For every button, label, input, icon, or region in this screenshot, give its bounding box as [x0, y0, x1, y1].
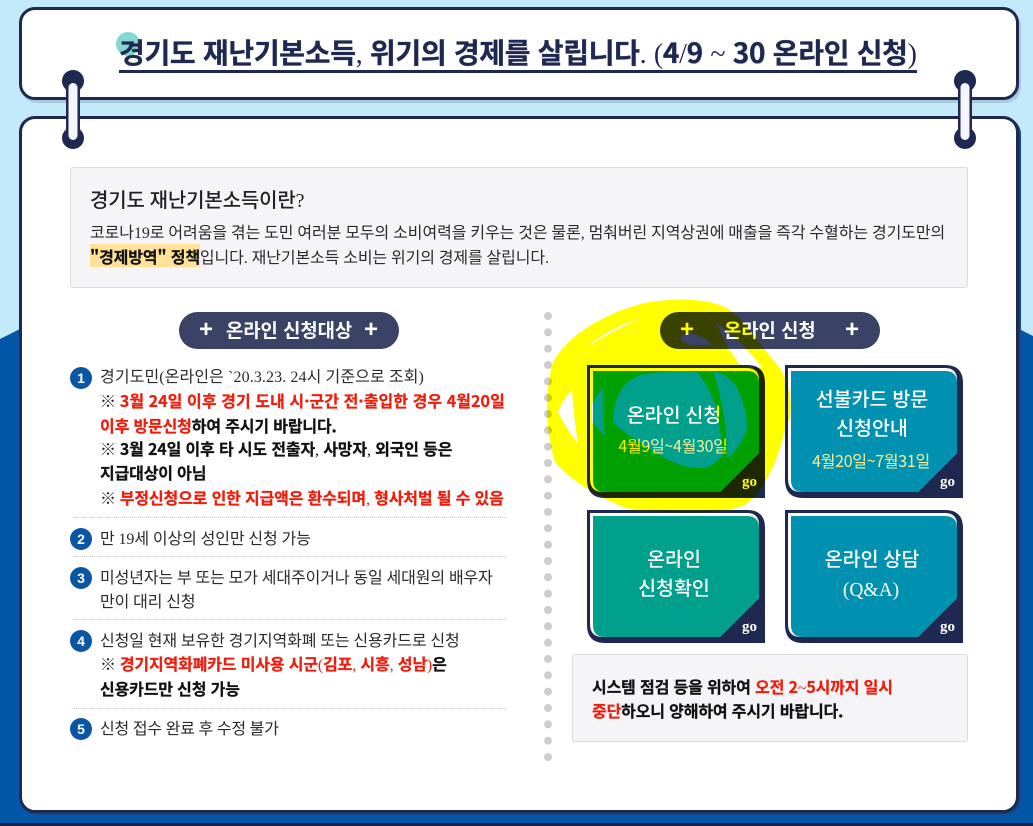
list item 3 number — [70, 567, 92, 589]
note line 1: 시스템 점검 등을 위하여 오전 2~5시까지 일시 — [592, 674, 893, 698]
card: prepaid card visit: 4월20일~7월31일 — [812, 448, 930, 472]
heading: definition: 경기도 재난기본소득이란? — [90, 190, 304, 212]
list item 4 line 1: 신청일 현재 보유한 경기지역화폐 또는 신용카드로 신청 — [100, 633, 460, 650]
separator — [72, 708, 507, 709]
panel: definition box — [70, 167, 968, 288]
list item 2 number — [70, 528, 92, 550]
list item 1 text: 경기도민(온라인은 `20.3.23. 24시 기준으로 조회) — [100, 369, 424, 386]
icon: right binder ring — [954, 70, 976, 149]
card: prepaid card visit: go — [940, 474, 955, 490]
pill heading: online application target: 온라인 신청대상 — [226, 316, 352, 343]
card: application check: 신청확인 — [638, 579, 710, 600]
pill heading: online application: + — [845, 316, 859, 343]
card: prepaid card visit — [785, 365, 963, 498]
list item 1 note a continued: 이후 방문신청하여 주시기 바랍니다. — [100, 413, 337, 437]
highlight: economic defense — [90, 244, 200, 267]
text: definition line 2: "경제방역" 정책입니다. 재난기본소득 소비는 위기의 경제를 살립니다. — [90, 244, 549, 268]
panel: system maintenance note — [572, 654, 968, 742]
separator — [72, 517, 507, 518]
pill heading: online application target: + — [199, 316, 213, 343]
card: online counseling: (Q&A) — [843, 580, 899, 601]
card: prepaid card visit: 신청안내 — [836, 419, 908, 440]
card: application check: go — [742, 619, 757, 635]
list item 1 number — [70, 367, 92, 389]
list item 1 note b: ※ 3월 24일 이후 타 시도 전출자, 사망자, 외국인 등은 — [100, 436, 452, 460]
list item 2 text: 만 19세 이상의 성인만 신청 가능 — [100, 531, 311, 548]
list item 4 number: 4 — [77, 633, 85, 649]
icon: left binder ring — [62, 70, 84, 149]
list item 3 number: 3 — [77, 570, 85, 586]
pill heading: online application target: + — [364, 316, 378, 343]
card: online counseling — [785, 510, 963, 643]
card: online application: 4월9일~4월30일 — [618, 433, 728, 457]
list item 3 line 1: 미성년자는 부 또는 모가 세대주이거나 동일 세대원의 배우자 — [100, 570, 493, 587]
card: online application: 온라인 신청 — [627, 406, 721, 427]
list item 5 text: 신청 접수 완료 후 수정 불가 — [100, 721, 279, 738]
list item 5 number — [70, 718, 92, 740]
card: online application — [587, 365, 765, 498]
list item 1 note b continued: 지급대상이 아님 — [100, 460, 206, 484]
card: online counseling: go — [940, 619, 955, 635]
list item 5 number: 5 — [77, 721, 85, 737]
list item 1 note a: ※ 3월 24일 이후 경기 도내 시·군간 전·출입한 경우 4월20일 — [100, 388, 505, 412]
card: prepaid card visit: 선불카드 방문 — [816, 390, 928, 411]
pill heading: online application: 온라인 신청 — [724, 316, 816, 343]
title text: 경기도 재난기본소득, 위기의 경제를 살립니다. (4/9 ~ 30 온라인 신청) — [119, 32, 917, 72]
dotted vertical divider — [544, 312, 552, 761]
text: definition line 1: 코로나19로 어려움을 겪는 도민 여러분 모두의 소비여력을 키우는 것은 물론, 멈춰버린 지역상권에 매출을 즉각 수혈하는 경기도만의 — [90, 225, 945, 242]
list item 3 line 2: 만이 대리 신청 — [100, 594, 196, 611]
separator — [72, 556, 507, 557]
note line 2: 중단하오니 양해하여 주시기 바랍니다. — [592, 698, 843, 722]
title — [116, 32, 917, 73]
list: eligibility — [70, 367, 507, 740]
list item 4 line 2: ※ 경기지역화폐카드 미사용 시군(김포, 시흥, 성남)은 — [100, 651, 447, 675]
separator — [72, 619, 507, 620]
title accent circle — [116, 32, 140, 56]
pill heading: online application target — [179, 312, 399, 349]
pill heading: online application: + — [680, 316, 694, 343]
list item 1 number: 1 — [77, 370, 85, 386]
list item 2 number: 2 — [77, 531, 85, 547]
list item 4 line 3: 신용카드만 신청 가능 — [100, 676, 240, 700]
card: online counseling: 온라인 상담 — [825, 550, 919, 571]
list item 1 note c: ※ 부정신청으로 인한 지급액은 환수되며, 형사처벌 될 수 있음 — [100, 485, 504, 509]
pill heading: online application — [660, 312, 880, 349]
list item 4 number — [70, 630, 92, 652]
card: online application: go — [742, 474, 757, 490]
card: application check — [587, 510, 765, 643]
card: application check: 온라인 — [647, 550, 701, 571]
panel: top title — [19, 7, 1019, 100]
